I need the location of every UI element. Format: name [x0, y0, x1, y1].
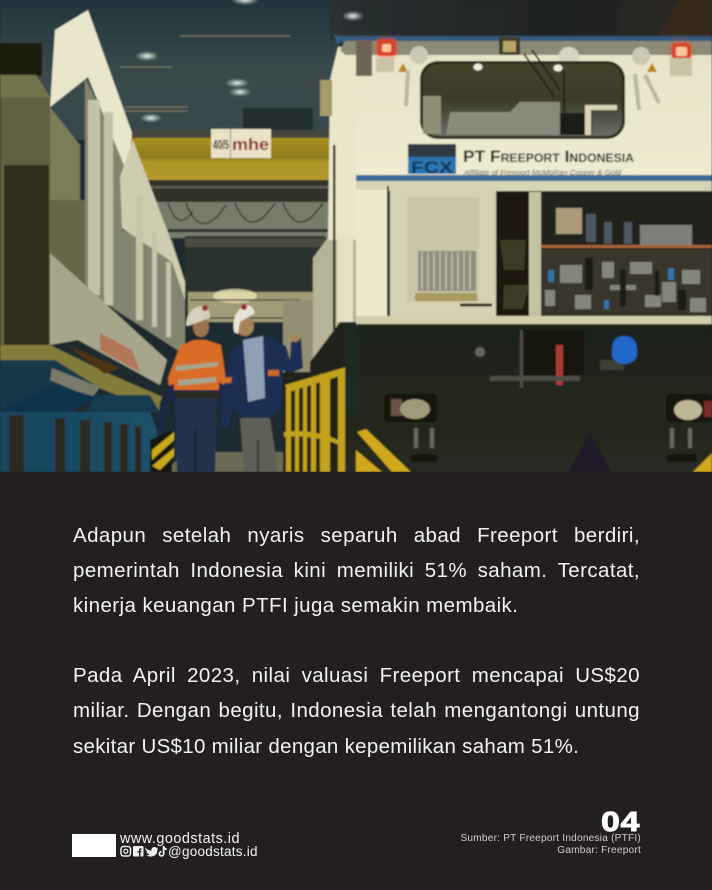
body text: paragraph 1: [73, 524, 640, 617]
blue plug: [612, 336, 637, 364]
footer logo placeholder: [72, 834, 116, 857]
left train car: [0, 10, 185, 472]
social icons: [120, 846, 167, 857]
source and image credit: Sumber: PT Freeport Indonesia (PTFI): [460, 833, 641, 844]
footer website and social handle: [120, 830, 258, 859]
side panels of right train: [283, 47, 358, 472]
worker in navy jacket: [220, 304, 303, 472]
body text: paragraph 1: pemerintah Indonesia kini memiliki 51% saham. Tercatat,: [73, 559, 640, 582]
body text: paragraph 2: sekitar US$10 miliar dengan kepemilikan saham 51%.: [73, 735, 579, 758]
open door with grille: [390, 185, 496, 320]
dark triangular notch: [568, 432, 612, 472]
logo FCX block: [408, 144, 456, 177]
yellow hazard stripes: [356, 429, 712, 472]
logo FCX block: FCX: [411, 158, 454, 177]
sign: 40/5 mhe: [211, 129, 271, 158]
background: far end of hall: [165, 236, 325, 472]
worker in orange vest: [157, 305, 227, 472]
photo: workers beside PT Freeport Indonesia underground train: [0, 0, 712, 472]
body text: paragraph 2: miliar. Dengan begitu, Indonesia telah mengantongi untung: [73, 699, 640, 722]
body text: paragraph 2: Pada April 2023, nilai valuasi Freeport mencapai US$20: [73, 664, 640, 687]
lower chassis: [345, 324, 712, 472]
right train body: [334, 33, 712, 320]
company name on train: PT Freeport Indonesia: [463, 147, 634, 166]
body text: paragraph 1: Adapun setelah nyaris separuh abad Freeport berdiri,: [73, 524, 640, 547]
yellow safety railing: [284, 367, 347, 472]
crane beam with sign: [130, 129, 330, 238]
page number: 04: [601, 806, 640, 837]
source and image credit: Gambar: Freeport: [557, 845, 641, 856]
footer website and social handle: @goodstats.id: [168, 844, 258, 859]
red warning lights: [371, 33, 696, 66]
headlights: [384, 394, 712, 462]
sign: 40/5 mhe: mhe: [232, 135, 269, 154]
company name on train: [463, 147, 634, 177]
body text: paragraph 1: kinerja keuangan PTFI juga semakin membaik.: [73, 594, 518, 617]
sign: 40/5 mhe: 40/5: [213, 137, 229, 152]
company name on train: Affiliate of Freeport-McMoRan Copper & Gold: [463, 168, 622, 177]
footer website and social handle: www.goodstats.id: [120, 830, 240, 846]
electrical compartment: [497, 192, 712, 316]
cab window: [420, 50, 625, 139]
source and image credit: [460, 833, 641, 856]
roof fittings: [356, 37, 692, 110]
body text: paragraph 2: [73, 664, 640, 758]
background: hall ceiling: [0, 0, 712, 472]
hazard stripes near workers: [150, 430, 174, 472]
